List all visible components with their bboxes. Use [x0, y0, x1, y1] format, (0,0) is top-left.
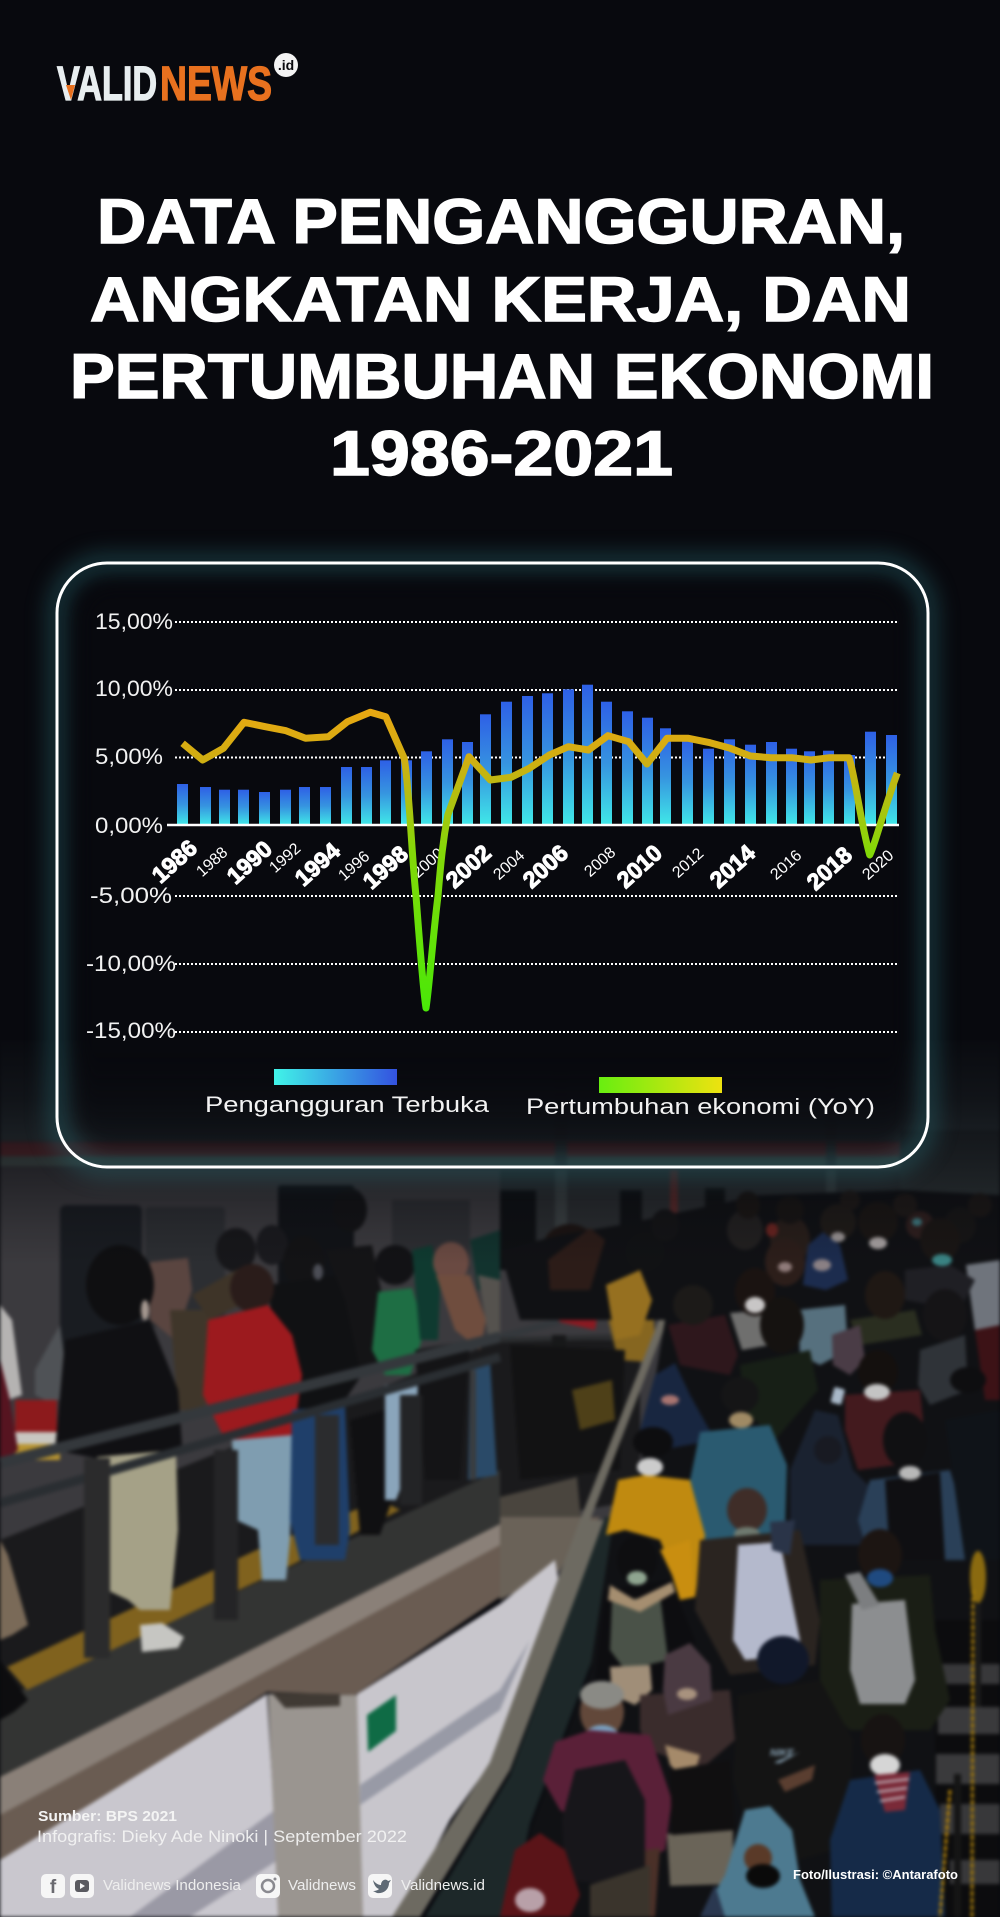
pale jeans — [385, 1385, 418, 1500]
legend — [205, 1069, 875, 1119]
photo credit: Foto/Ilustrasi: ©Antarafoto — [793, 1867, 958, 1882]
teal mask person — [920, 1218, 960, 1262]
young man head — [858, 1350, 898, 1394]
x axis year labels: 1992 — [266, 840, 304, 877]
beige trousers — [97, 1450, 178, 1610]
dark jeans — [290, 1405, 350, 1560]
grey top right — [966, 1260, 1000, 1330]
black cap — [633, 1427, 673, 1457]
black hijab — [757, 1636, 809, 1684]
y axis labels: 0,00% — [95, 813, 163, 838]
dark cap head — [721, 1377, 759, 1413]
title: DATA PENGANGGURAN, — [97, 187, 905, 257]
paper bag — [0, 1540, 28, 1640]
red hat accent — [766, 1223, 778, 1237]
swoosh — [775, 1752, 800, 1763]
white wall left — [0, 1694, 280, 1917]
tactile paving — [7, 1500, 400, 1690]
dark jacket far right — [945, 1410, 1000, 1560]
tall man dark shirt — [325, 1188, 402, 1370]
y axis labels: -5,00% — [90, 883, 172, 908]
x axis year labels: 1998 — [358, 840, 413, 894]
logo — [57, 53, 298, 111]
legend: unemployment: Pengangguran Terbuka — [205, 1092, 490, 1117]
hand — [778, 1765, 815, 1792]
concrete ledge — [0, 1517, 600, 1860]
face masks — [637, 1218, 952, 1541]
title: 1986-2021 — [330, 419, 673, 489]
right crowd base — [500, 1190, 1000, 1917]
left stair handrail and glass — [0, 1314, 666, 1658]
x axis year labels: 2018 — [802, 841, 857, 895]
brown jacket man — [695, 1530, 820, 1675]
man head with black mask — [865, 1271, 905, 1319]
x axis year labels: 2010 — [612, 839, 667, 893]
hood face — [814, 1436, 842, 1464]
stripe shirt woman head — [861, 1714, 905, 1766]
green backpack — [610, 1595, 668, 1670]
y axis labels: 10,00% — [95, 676, 173, 701]
hijab woman — [150, 1258, 210, 1410]
light jeans — [232, 1435, 292, 1580]
top dark fade over photo — [0, 1030, 1000, 1266]
escalator handrail — [392, 1317, 668, 1917]
long hair woman — [548, 1228, 605, 1290]
source credits — [37, 1809, 407, 1846]
black mask man head — [760, 1297, 804, 1353]
yellow jacket — [606, 1272, 655, 1362]
x axis year labels — [147, 834, 897, 895]
cap man right — [950, 1367, 986, 1393]
arm and shirt — [905, 1265, 975, 1310]
dark legs — [415, 1340, 470, 1480]
x axis year labels: 2014 — [705, 839, 760, 893]
logo: NEWS — [160, 58, 272, 111]
left crowd — [0, 1188, 500, 1720]
y axis labels: -10,00% — [86, 951, 176, 976]
denim skirt — [468, 1360, 497, 1480]
person in maroon — [0, 1360, 18, 1465]
white blouse — [730, 1310, 770, 1350]
patterned hijab — [832, 1325, 865, 1375]
right train carriage — [500, 1040, 1000, 1270]
y axis labels: -15,00% — [86, 1018, 176, 1043]
blue hijab — [700, 1806, 815, 1917]
y axis labels — [86, 609, 176, 1043]
white mask — [870, 1754, 900, 1776]
white stripes — [875, 1779, 909, 1801]
icon: facebook: f — [50, 1877, 57, 1898]
title: ANGKATAN KERJA, DAN — [90, 265, 911, 335]
yellow tee lower — [660, 1540, 695, 1600]
backpack man — [192, 1225, 288, 1320]
beige mask — [677, 1688, 697, 1700]
maroon man — [668, 1315, 738, 1375]
maroon tee — [845, 1390, 923, 1470]
stairs at right — [935, 1620, 1000, 1917]
nike logo text: NIKE — [770, 1748, 794, 1759]
emergency exit sign — [367, 1695, 396, 1752]
train yellow band — [15, 1400, 57, 1432]
x axis year labels: 2012 — [669, 845, 707, 882]
woman head white mask — [735, 1268, 775, 1316]
arm — [645, 1848, 660, 1917]
bald head — [727, 1488, 767, 1532]
train door — [278, 1185, 354, 1285]
navy hijab — [803, 1232, 848, 1290]
grid lines — [175, 622, 898, 1032]
diagonal shadow on right wall — [360, 1640, 530, 1805]
y axis labels: 5,00% — [95, 744, 163, 769]
striped gloves — [665, 1745, 700, 1775]
train window left — [60, 1205, 225, 1395]
x axis year labels: 2002 — [441, 839, 496, 893]
young man body — [595, 1580, 695, 1710]
x axis year labels: 1990 — [222, 835, 277, 889]
grey backpack — [918, 1335, 968, 1405]
backpack black — [562, 1760, 645, 1885]
man head lower right — [883, 1412, 927, 1468]
head blue mask man — [858, 1529, 902, 1581]
backpack on denim — [885, 1472, 945, 1560]
legend: unemployment — [205, 1069, 490, 1117]
green shirt woman — [372, 1245, 425, 1375]
green jacket man — [740, 1350, 818, 1440]
social icons and handles — [41, 1874, 485, 1898]
stanchions and gold chains — [940, 1550, 986, 1917]
x axis year labels: 2006 — [518, 839, 573, 893]
tactile behind rail — [572, 1380, 615, 1430]
maroon right edge — [975, 1325, 1000, 1400]
white shirt — [733, 1542, 800, 1660]
black-clad woman — [55, 1245, 182, 1465]
panel border — [57, 563, 928, 1167]
x axis year labels: 1994 — [290, 837, 345, 891]
grey top rear — [478, 1275, 500, 1335]
concrete pillar — [268, 1694, 364, 1917]
backpack strap blue — [770, 1520, 795, 1555]
grey jacket — [35, 1325, 70, 1400]
white sneakers — [140, 1623, 184, 1652]
trousers — [590, 1865, 650, 1917]
green mask — [627, 1571, 647, 1585]
x axis year labels: 2008 — [581, 844, 619, 881]
panel interior — [78, 584, 907, 1146]
beige trousers — [667, 1830, 733, 1886]
unemployment bars — [177, 685, 897, 825]
black shoe — [0, 1660, 28, 1720]
platform floor — [0, 1340, 640, 1777]
tan hijab — [433, 1242, 486, 1350]
maroon shirt — [543, 1730, 672, 1860]
black balaclava woman — [923, 1289, 967, 1341]
pale blue scarf — [798, 1305, 848, 1365]
dark green jacket man — [820, 1575, 950, 1730]
photo: commuters on station stairs — [0, 1040, 1000, 1917]
source credits: Sumber: BPS 2021 — [38, 1809, 177, 1825]
logo: VALID — [57, 58, 157, 111]
text: facebook youtube handle: Validnews Indonesia — [103, 1878, 242, 1894]
tan straps — [608, 1582, 675, 1612]
long brown hair — [765, 1238, 805, 1286]
man head — [673, 1285, 713, 1325]
olive jacket man — [850, 1310, 922, 1345]
checked shirt — [700, 1885, 725, 1917]
train red stripe — [0, 1142, 1000, 1156]
beige pouch — [610, 1665, 652, 1705]
navy hood — [790, 1410, 873, 1545]
x axis year labels: 1996 — [335, 848, 373, 885]
person in white shirt — [0, 1305, 22, 1400]
purple hijab — [663, 1643, 712, 1715]
title: PERTUMBUHAN EKONOMI — [70, 342, 934, 412]
red jacket woman — [203, 1264, 302, 1445]
icon: youtube — [70, 1874, 94, 1898]
teal sweater — [688, 1425, 787, 1545]
train pale stripe — [0, 1156, 1000, 1166]
dark bag center — [670, 1760, 735, 1835]
grey-haired man head — [580, 1686, 624, 1738]
text: instagram handle: Validnews — [288, 1878, 356, 1894]
upper crowd — [548, 1190, 1000, 1600]
denim jacket — [858, 1470, 970, 1560]
grey hair — [580, 1681, 624, 1709]
chart — [86, 609, 899, 1119]
icon: instagram — [256, 1874, 280, 1898]
red shirt head — [542, 1224, 598, 1276]
grey platform edge — [0, 1470, 500, 1777]
yellow tee — [606, 1475, 705, 1597]
x axis year labels: 2020 — [859, 847, 897, 884]
x axis year labels: 2016 — [767, 847, 805, 884]
dark jacket rear — [470, 1230, 500, 1290]
legend: economic growth: Pertumbuhan ekonomi (YoY) — [526, 1094, 875, 1119]
green jacket backpack — [412, 1245, 440, 1340]
lower crowd — [500, 1520, 950, 1917]
y axis labels: 15,00% — [95, 609, 173, 634]
yellow mustard jacket highlight — [606, 1270, 652, 1340]
legend: economic growth — [526, 1077, 875, 1119]
icon: twitter — [368, 1874, 392, 1898]
batik woman — [640, 1690, 735, 1770]
white wall right — [357, 1560, 560, 1917]
train white band — [15, 1432, 60, 1444]
icon: facebook — [41, 1874, 65, 1898]
pale ledge top — [0, 1524, 500, 1815]
escalator glass — [425, 1517, 614, 1917]
panel glow — [57, 563, 928, 1167]
train window middle — [392, 1200, 470, 1270]
legs behind rail — [510, 1345, 625, 1480]
train wall — [0, 1040, 1000, 1580]
blue jacket — [830, 1770, 945, 1917]
black shirt man — [268, 1236, 365, 1420]
red hijab — [500, 1833, 580, 1917]
pillar damage — [272, 1693, 340, 1708]
grey backpack — [850, 1600, 915, 1704]
text: twitter handle: Validnews.id — [401, 1878, 485, 1894]
hijab face — [744, 1844, 772, 1872]
title — [70, 187, 934, 489]
shadow band on left wall — [130, 1810, 278, 1917]
economic growth line — [183, 712, 897, 1008]
logo .id badge: .id — [278, 57, 294, 73]
young man head — [617, 1536, 657, 1584]
rear heads — [651, 1190, 992, 1264]
blue mask — [867, 1569, 893, 1587]
x axis year labels: 2000 — [409, 845, 447, 882]
person in red shirt at rail — [545, 1265, 600, 1330]
floor behind rail — [500, 1477, 582, 1530]
x axis year labels: 1986 — [147, 834, 202, 888]
station roof — [0, 1040, 1000, 1140]
pink mask — [515, 1888, 545, 1912]
train gold band — [15, 1444, 60, 1460]
x axis year labels: 1988 — [193, 844, 231, 881]
yellow jacket head — [625, 1232, 665, 1272]
backpack straps — [845, 1572, 880, 1610]
black veil — [746, 1864, 780, 1888]
zero axis — [167, 824, 899, 826]
source credits: Infografis: Dieky Ade Ninoki | September 2022 — [37, 1827, 407, 1846]
logo V accent — [66, 85, 75, 100]
black trousers — [350, 1410, 392, 1535]
black jacket woman — [733, 1680, 853, 1870]
striped shirt — [874, 1772, 910, 1812]
navy hijab lower — [640, 1363, 715, 1450]
blue surgical mask — [585, 1725, 619, 1749]
logo .id badge — [274, 53, 298, 77]
ledge far section — [500, 1517, 590, 1600]
x axis year labels: 2004 — [490, 847, 528, 884]
